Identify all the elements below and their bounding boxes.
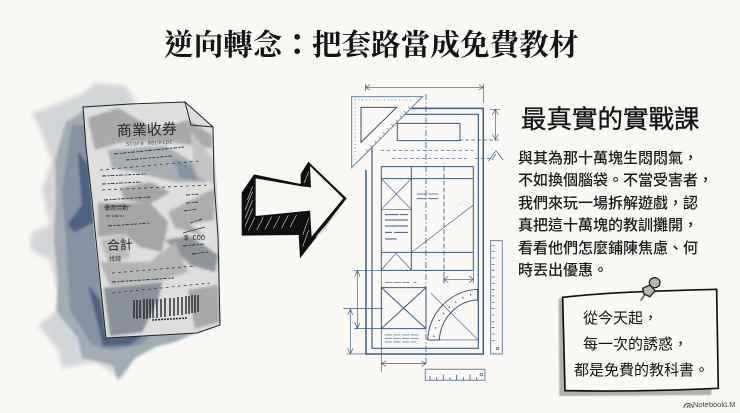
body text: 時丟出優惠。 — [518, 259, 608, 280]
note text — [574, 307, 709, 380]
receipt barcode — [134, 295, 198, 320]
right dimension arrow — [490, 109, 500, 140]
body text — [518, 146, 713, 280]
body text: 真把這十萬塊的教訓攤開， — [518, 214, 698, 235]
layout grid — [381, 167, 473, 283]
blueprint frames — [366, 108, 483, 354]
receipt item labels: 優惠活動 — [104, 204, 128, 212]
dashed guide lines — [381, 140, 500, 158]
NotebookLM credit: NotebookLM — [693, 400, 736, 409]
receipt paper — [84, 102, 220, 338]
note text: 都是免費的教科書。 — [574, 359, 709, 380]
note text: 每一次的誘惑， — [583, 333, 688, 354]
blueprint drawing — [343, 83, 503, 380]
pinned note — [559, 278, 718, 396]
body text: 與其為那十萬塊生悶悶氣， — [518, 146, 698, 168]
receipt price: $ COO — [184, 235, 205, 243]
vertical ruler — [491, 241, 502, 354]
receipt title: 商業收券 — [117, 121, 177, 140]
note box — [563, 289, 718, 391]
top dimension arrow — [366, 83, 483, 103]
sketched arrow — [242, 162, 347, 258]
NotebookLM icon — [684, 404, 693, 408]
body text: 看看他們怎麼鋪陳焦慮、何 — [518, 236, 698, 258]
receipt stains — [88, 108, 220, 336]
receipt subtitle: Store Receipt — [126, 139, 173, 148]
note lines — [385, 283, 420, 342]
body text: 不如換個腦袋。不當受害者， — [518, 169, 713, 190]
receipt scribbled lines — [102, 147, 208, 282]
receipt total: 合計 — [107, 237, 133, 253]
watercolor stained receipt — [30, 83, 220, 380]
note shadow — [559, 298, 711, 396]
lower dimension arrows — [343, 270, 473, 372]
top block — [397, 123, 460, 141]
crossed box — [381, 288, 426, 329]
receipt small label: 找錢 — [109, 255, 121, 263]
level mark — [488, 151, 503, 161]
set square ruler — [352, 97, 423, 168]
protractor — [428, 289, 478, 340]
horizontal ruler — [425, 369, 485, 380]
section heading: 最真實的實戰課 — [521, 99, 700, 136]
receipt dashed lines — [100, 161, 210, 293]
push pin — [641, 278, 660, 301]
note text: 從今天起， — [583, 307, 658, 328]
receipt outline — [83, 102, 220, 338]
title: 逆向轉念：把套路當成免費教材 — [164, 21, 578, 64]
receipt total rule — [183, 227, 205, 233]
center line — [425, 94, 427, 363]
body text: 我們來玩一場拆解遊戲，認 — [518, 192, 698, 212]
ink blot behind receipt — [30, 83, 198, 380]
